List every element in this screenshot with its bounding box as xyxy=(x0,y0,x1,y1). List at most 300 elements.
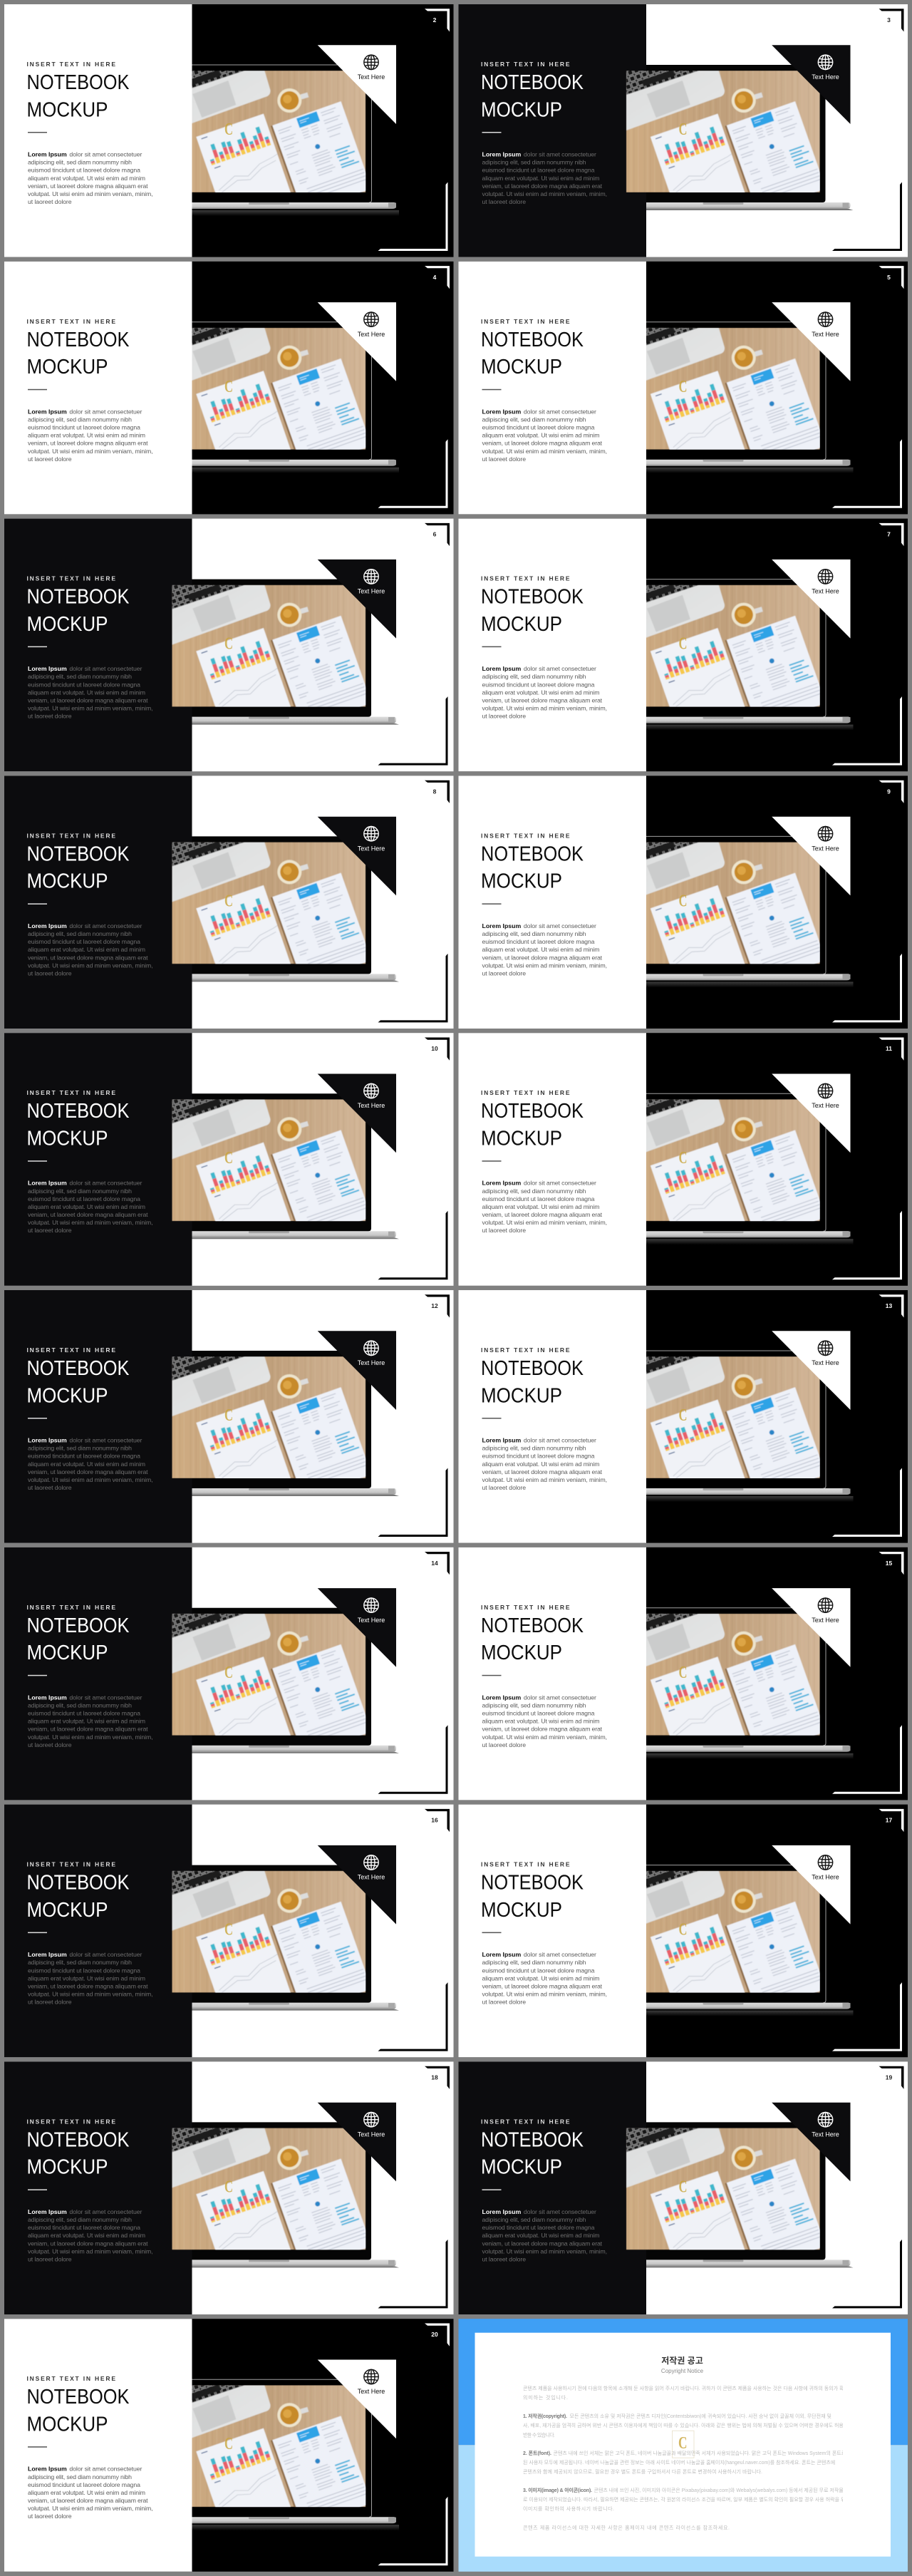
body text: aliquam erat volutpat. Ut wisi enim ad minim xyxy=(28,689,145,696)
watermark: C xyxy=(224,2435,233,2453)
title: NOTEBOOK xyxy=(27,2128,130,2151)
body text: euismod tincidunt ut laoreet dolore magna xyxy=(28,423,140,431)
callout triangle xyxy=(318,1588,396,1667)
body text: veniam, ut laoreet dolore magna aliquam erat xyxy=(28,954,148,961)
body text: aliquam erat volutpat. Ut wisi enim ad minim xyxy=(28,1203,145,1210)
slide 8 xyxy=(4,776,453,1029)
callout triangle: Text Here xyxy=(812,2131,839,2138)
body text: veniam, ut laoreet dolore magna aliquam erat xyxy=(482,1726,603,1733)
body text: adipiscing elit, sed diam nonummy nibh xyxy=(482,1445,586,1452)
page number: 16 xyxy=(431,1817,438,1824)
body text: dolor sit amet consectetuer xyxy=(69,2208,142,2215)
body text: aliquam erat volutpat. Ut wisi enim ad minim xyxy=(28,1718,145,1725)
notice text: 콘텐츠 제품을 사용하시기 전에 다음의 항목에 소개해 둔 사항을 읽어 주시기 바랍니다. 귀하가 이 콘텐츠 제품을 사용하는 것은 다음 사항에 귀하의 동의가 확보되어 있음을 xyxy=(523,2385,874,2391)
body text: volutpat. Ut wisi enim ad minim veniam, minim, xyxy=(28,190,152,197)
callout triangle: Text Here xyxy=(812,588,839,595)
watermark: C xyxy=(678,635,687,654)
laptop screen photo xyxy=(626,1099,826,1253)
title xyxy=(481,843,584,893)
laptop xyxy=(172,579,399,725)
notice text: 로 이용되어 제작되었습니다. 따라서, 필요하면 제공되는 콘텐츠는, 각 원본의 라이선스 조건을 따르며, 일부 제품은 별도의 확인이 필요할 경우 사용 허락을 위하여 사전 xyxy=(523,2496,865,2503)
body text: dolor sit amet consectetuer xyxy=(69,665,142,672)
notice text: 모든 콘텐츠의 소유 및 저작권은 콘텐츠 디자인(Contentsbiwon)에 귀속되어 있습니다. 사전 승낙 없이 글꼴체 이외, 무단전재 및 xyxy=(570,2413,831,2419)
eyebrow: INSERT TEXT IN HERE xyxy=(481,1861,570,1868)
callout triangle xyxy=(318,560,396,639)
body text: adipiscing elit, sed diam nonummy nibh xyxy=(482,2216,586,2223)
dark panel xyxy=(4,1805,192,2057)
laptop xyxy=(172,2122,399,2267)
laptop xyxy=(172,1865,399,2011)
body text: ut laoreet dolore xyxy=(482,969,526,977)
title: NOTEBOOK xyxy=(27,2386,130,2408)
callout triangle xyxy=(772,817,851,895)
watermark: C xyxy=(224,1406,233,1425)
body text: Lorem Ipsum xyxy=(482,1951,521,1958)
body text: adipiscing elit, sed diam nonummy nibh xyxy=(28,1701,132,1709)
title xyxy=(481,1357,584,1407)
watermark: C xyxy=(678,1921,687,1939)
body text: Lorem Ipsum xyxy=(28,151,67,158)
laptop screen photo xyxy=(626,2128,826,2282)
corner brackets xyxy=(832,266,903,508)
page number: 15 xyxy=(886,1560,892,1567)
background xyxy=(4,519,453,771)
body text xyxy=(482,151,607,205)
laptop screen photo xyxy=(626,842,826,996)
body text: ut laoreet dolore xyxy=(28,1227,72,1234)
body text: aliquam erat volutpat. Ut wisi enim ad minim xyxy=(28,2232,145,2239)
callout triangle: Text Here xyxy=(358,1102,385,1109)
body text: euismod tincidunt ut laoreet dolore magna xyxy=(28,1195,140,1202)
title: MOCKUP xyxy=(27,1642,108,1664)
slide 12 xyxy=(4,1290,453,1543)
page number: 5 xyxy=(887,274,891,281)
body text xyxy=(482,665,607,720)
title xyxy=(27,329,130,378)
corner brackets xyxy=(378,1038,450,1279)
copyright title: 저작권 공고 xyxy=(661,2355,703,2366)
laptop screen photo xyxy=(172,1099,372,1253)
page number: 2 xyxy=(433,16,437,24)
title: MOCKUP xyxy=(481,356,562,378)
title: NOTEBOOK xyxy=(27,1100,130,1123)
body text: aliquam erat volutpat. Ut wisi enim ad minim xyxy=(28,175,145,182)
laptop xyxy=(646,1093,854,1245)
body text xyxy=(28,1437,152,1491)
title: NOTEBOOK xyxy=(481,1100,584,1123)
title: MOCKUP xyxy=(27,2413,108,2436)
eyebrow: INSERT TEXT IN HERE xyxy=(481,61,570,68)
slide 7 xyxy=(459,519,908,771)
watermark: C xyxy=(678,1406,687,1425)
body text: aliquam erat volutpat. Ut wisi enim ad minim xyxy=(28,432,145,439)
callout triangle xyxy=(772,560,851,639)
title xyxy=(481,1614,584,1664)
laptop screen photo xyxy=(172,1871,372,2025)
corner brackets xyxy=(832,1552,903,1794)
body text: euismod tincidunt ut laoreet dolore magna xyxy=(482,1195,595,1202)
laptop xyxy=(192,322,399,473)
background xyxy=(4,1805,453,2057)
dark panel xyxy=(4,2061,192,2314)
white panel xyxy=(459,1290,646,1543)
body text: volutpat. Ut wisi enim ad minim veniam, minim, xyxy=(28,1733,152,1741)
callout triangle: Text Here xyxy=(812,1874,839,1881)
title xyxy=(27,2128,130,2179)
callout triangle xyxy=(772,2103,851,2181)
eyebrow: INSERT TEXT IN HERE xyxy=(27,61,115,68)
watermark: C xyxy=(678,2178,687,2196)
body text: Lorem Ipsum xyxy=(482,1437,521,1444)
eyebrow: INSERT TEXT IN HERE xyxy=(481,1089,570,1096)
laptop xyxy=(626,65,854,210)
laptop xyxy=(172,1093,399,1239)
eyebrow: INSERT TEXT IN HERE xyxy=(27,318,115,325)
body text: veniam, ut laoreet dolore magna aliquam erat xyxy=(28,440,148,447)
body text: dolor sit amet consectetuer xyxy=(524,2208,596,2215)
body text: volutpat. Ut wisi enim ad minim veniam, minim, xyxy=(482,705,607,712)
white panel xyxy=(4,262,192,514)
body text: volutpat. Ut wisi enim ad minim veniam, minim, xyxy=(28,448,152,455)
divider xyxy=(482,389,502,390)
body text xyxy=(28,2466,152,2520)
page number: 3 xyxy=(887,16,891,24)
corner brackets xyxy=(378,780,450,1022)
body text: ut laoreet dolore xyxy=(28,1741,72,1748)
body text: ut laoreet dolore xyxy=(28,1484,72,1491)
body text: adipiscing elit, sed diam nonummy nibh xyxy=(482,1187,586,1195)
body text: volutpat. Ut wisi enim ad minim veniam, minim, xyxy=(28,1476,152,1483)
body text: veniam, ut laoreet dolore magna aliquam erat xyxy=(482,182,603,190)
watermark: C xyxy=(224,1921,233,1939)
title: NOTEBOOK xyxy=(481,1357,584,1380)
body text: ut laoreet dolore xyxy=(482,455,526,463)
body text: adipiscing elit, sed diam nonummy nibh xyxy=(482,416,586,423)
page number: 20 xyxy=(431,2331,438,2338)
body text: ut laoreet dolore xyxy=(28,455,72,463)
body text xyxy=(28,2208,152,2262)
body text: ut laoreet dolore xyxy=(482,1227,526,1234)
divider xyxy=(28,389,47,390)
title: MOCKUP xyxy=(27,870,108,893)
laptop xyxy=(172,836,399,982)
body text: Lorem Ipsum xyxy=(28,408,67,415)
page number: 13 xyxy=(886,1302,892,1309)
body text: volutpat. Ut wisi enim ad minim veniam, minim, xyxy=(482,2247,607,2255)
watermark: C xyxy=(678,120,687,139)
light blue lower background xyxy=(459,2445,908,2572)
watermark: C xyxy=(224,1664,233,1682)
body text: volutpat. Ut wisi enim ad minim veniam, minim, xyxy=(28,962,152,969)
page number: 10 xyxy=(431,1045,438,1052)
title: MOCKUP xyxy=(27,1127,108,1150)
body text: volutpat. Ut wisi enim ad minim veniam, minim, xyxy=(482,962,607,969)
body text: aliquam erat volutpat. Ut wisi enim ad minim xyxy=(482,175,600,182)
callout triangle: Text Here xyxy=(358,1617,385,1624)
divider xyxy=(482,1675,502,1676)
callout triangle: Text Here xyxy=(358,2131,385,2138)
slide 17 xyxy=(459,1805,908,2057)
page number: 12 xyxy=(431,1302,438,1309)
body text: dolor sit amet consectetuer xyxy=(524,1437,596,1444)
laptop screen photo xyxy=(172,2128,372,2282)
body text: veniam, ut laoreet dolore magna aliquam erat xyxy=(482,1211,603,1218)
body text: adipiscing elit, sed diam nonummy nibh xyxy=(28,2216,132,2223)
watermark: C xyxy=(678,378,687,396)
title xyxy=(481,71,584,121)
title xyxy=(27,71,130,121)
dark panel xyxy=(4,519,192,771)
body text: adipiscing elit, sed diam nonummy nibh xyxy=(482,1959,586,1966)
body text: aliquam erat volutpat. Ut wisi enim ad minim xyxy=(482,1460,600,1468)
callout triangle: Text Here xyxy=(358,1874,385,1881)
title: NOTEBOOK xyxy=(481,586,584,609)
laptop screen photo xyxy=(626,1871,826,2025)
laptop xyxy=(646,836,854,987)
eyebrow: INSERT TEXT IN HERE xyxy=(27,2375,115,2382)
laptop xyxy=(192,2379,399,2530)
divider xyxy=(28,1160,47,1162)
white panel xyxy=(459,1033,646,1286)
background xyxy=(4,4,453,257)
background xyxy=(459,1547,908,1800)
notice text xyxy=(523,2385,874,2530)
title: MOCKUP xyxy=(481,1384,562,1407)
background xyxy=(459,4,908,257)
body text: Lorem Ipsum xyxy=(28,922,67,929)
body text: Lorem Ipsum xyxy=(28,1694,67,1701)
watermark: C xyxy=(678,2434,687,2453)
laptop screen photo xyxy=(626,71,826,225)
laptop screen photo xyxy=(626,585,826,739)
white panel xyxy=(459,519,646,771)
eyebrow: INSERT TEXT IN HERE xyxy=(481,1346,570,1354)
callout triangle xyxy=(772,45,851,124)
body text xyxy=(28,1694,152,1748)
page number: 17 xyxy=(886,1817,892,1824)
callout triangle xyxy=(772,1073,851,1153)
corner brackets xyxy=(378,1809,450,2051)
eyebrow: INSERT TEXT IN HERE xyxy=(27,832,115,839)
body text: ut laoreet dolore xyxy=(28,198,72,205)
dark panel xyxy=(4,776,192,1029)
notice text: 된 사용자 모두에 제공됩니다. 네이버 나눔글꼴 관련 정보는 아래 사이트 네이버 나눔글꼴 홈페이지(hangeul.naver.com)를 참조하세요. 폰트는 콘텐츠에 xyxy=(523,2459,835,2466)
panel: copyright notice slide xyxy=(459,2319,908,2572)
body text: volutpat. Ut wisi enim ad minim veniam, minim, xyxy=(482,1733,607,1741)
slide 13 xyxy=(459,1290,908,1543)
body text: euismod tincidunt ut laoreet dolore magna xyxy=(482,1453,595,1460)
body text: aliquam erat volutpat. Ut wisi enim ad minim xyxy=(482,946,600,953)
body text xyxy=(28,151,152,205)
body text: euismod tincidunt ut laoreet dolore magna xyxy=(482,2224,595,2231)
body text: veniam, ut laoreet dolore magna aliquam erat xyxy=(482,696,603,704)
eyebrow: INSERT TEXT IN HERE xyxy=(481,318,570,325)
background xyxy=(4,1033,453,1286)
divider xyxy=(482,1160,502,1162)
page number: 7 xyxy=(887,531,891,538)
body text: aliquam erat volutpat. Ut wisi enim ad minim xyxy=(482,432,600,439)
page number: 19 xyxy=(886,2073,892,2081)
body text: dolor sit amet consectetuer xyxy=(69,1180,142,1187)
body text: dolor sit amet consectetuer xyxy=(69,2466,142,2473)
eyebrow: INSERT TEXT IN HERE xyxy=(27,2118,115,2125)
body text xyxy=(28,1951,152,2006)
corner brackets xyxy=(378,2066,450,2308)
page number: 4 xyxy=(433,274,437,281)
title: MOCKUP xyxy=(27,613,108,636)
title: MOCKUP xyxy=(481,98,562,121)
body text: dolor sit amet consectetuer xyxy=(524,1951,596,1958)
corner brackets xyxy=(378,1294,450,1537)
body text xyxy=(482,922,607,977)
page number: 14 xyxy=(431,1560,438,1567)
body text: volutpat. Ut wisi enim ad minim veniam, minim, xyxy=(28,2247,152,2255)
watermark: C xyxy=(224,120,233,139)
body text: aliquam erat volutpat. Ut wisi enim ad minim xyxy=(28,946,145,953)
body text: aliquam erat volutpat. Ut wisi enim ad minim xyxy=(482,689,600,696)
white panel xyxy=(459,776,646,1029)
body text: adipiscing elit, sed diam nonummy nibh xyxy=(28,416,132,423)
title: MOCKUP xyxy=(27,2156,108,2179)
body text: aliquam erat volutpat. Ut wisi enim ad minim xyxy=(28,1460,145,1468)
body text: veniam, ut laoreet dolore magna aliquam erat xyxy=(28,182,148,190)
body text: veniam, ut laoreet dolore magna aliquam erat xyxy=(482,1983,603,1990)
body text: Lorem Ipsum xyxy=(482,665,521,672)
callout triangle xyxy=(318,2103,396,2181)
body text: Lorem Ipsum xyxy=(28,1951,67,1958)
body text: veniam, ut laoreet dolore magna aliquam erat xyxy=(28,2497,148,2504)
slide 18 xyxy=(4,2061,453,2314)
title: NOTEBOOK xyxy=(481,1872,584,1895)
divider xyxy=(482,903,502,905)
background xyxy=(459,519,908,771)
body text: ut laoreet dolore xyxy=(28,1999,72,2006)
body text: veniam, ut laoreet dolore magna aliquam erat xyxy=(482,1468,603,1475)
title: NOTEBOOK xyxy=(27,71,130,94)
body text: ut laoreet dolore xyxy=(482,713,526,720)
laptop xyxy=(192,65,399,216)
eyebrow: INSERT TEXT IN HERE xyxy=(27,575,115,582)
eyebrow: INSERT TEXT IN HERE xyxy=(27,1861,115,1868)
divider xyxy=(482,132,502,133)
callout triangle xyxy=(772,1331,851,1410)
body text xyxy=(28,1180,152,1234)
page number: 11 xyxy=(886,1045,892,1052)
background xyxy=(4,1290,453,1543)
slide 3 xyxy=(459,4,908,257)
slide 5 xyxy=(459,262,908,514)
callout triangle: Text Here xyxy=(358,73,385,81)
corner brackets xyxy=(832,1809,903,2051)
watermark: C xyxy=(678,892,687,910)
corner brackets xyxy=(378,523,450,766)
callout triangle: Text Here xyxy=(812,73,839,81)
body text: ut laoreet dolore xyxy=(28,2255,72,2262)
eyebrow: INSERT TEXT IN HERE xyxy=(481,1604,570,1611)
dark panel xyxy=(4,1290,192,1543)
body text xyxy=(482,2208,607,2262)
background xyxy=(459,1290,908,1543)
divider xyxy=(28,2446,47,2448)
title: NOTEBOOK xyxy=(481,1614,584,1637)
dark panel xyxy=(459,2061,646,2314)
body text xyxy=(482,1694,607,1748)
callout triangle xyxy=(318,2359,396,2438)
body text: euismod tincidunt ut laoreet dolore magna xyxy=(482,167,595,174)
title xyxy=(27,586,130,636)
body text: dolor sit amet consectetuer xyxy=(69,408,142,415)
callout triangle: Text Here xyxy=(358,588,385,595)
watermark: C xyxy=(678,1664,687,1682)
body text: euismod tincidunt ut laoreet dolore magna xyxy=(28,2481,140,2488)
body text: Lorem Ipsum xyxy=(28,2208,67,2215)
laptop screen photo xyxy=(626,1614,826,1768)
body text: ut laoreet dolore xyxy=(28,969,72,977)
body text: dolor sit amet consectetuer xyxy=(69,922,142,929)
body text xyxy=(482,1437,607,1491)
notice text: 콘텐츠 내에 쓰인 서체는 맑은 고딕 폰트, 네이버 나눔글꼴과 배달의민족 서체가 사용되었습니다. 맑은 고딕 폰트는 Windows System의 폰트로 xyxy=(553,2450,846,2456)
body text: euismod tincidunt ut laoreet dolore magna xyxy=(28,938,140,945)
title: MOCKUP xyxy=(27,356,108,378)
watermark: C xyxy=(224,2178,233,2196)
eyebrow: INSERT TEXT IN HERE xyxy=(27,1604,115,1611)
body text: aliquam erat volutpat. Ut wisi enim ad minim xyxy=(28,1974,145,1982)
body text: Lorem Ipsum xyxy=(482,1180,521,1187)
divider xyxy=(28,903,47,905)
slide 14 xyxy=(4,1547,453,1800)
body text: veniam, ut laoreet dolore magna aliquam erat xyxy=(482,954,603,961)
body text: dolor sit amet consectetuer xyxy=(524,1180,596,1187)
title xyxy=(27,1614,130,1664)
body text: adipiscing elit, sed diam nonummy nibh xyxy=(28,1187,132,1195)
body text: adipiscing elit, sed diam nonummy nibh xyxy=(482,159,586,166)
copyright subtitle: Copyright Notice xyxy=(661,2368,704,2374)
callout triangle xyxy=(318,817,396,895)
title: MOCKUP xyxy=(481,1899,562,1922)
watermark: C xyxy=(224,635,233,654)
laptop screen photo xyxy=(172,1356,372,1510)
title: MOCKUP xyxy=(27,1899,108,1922)
title: NOTEBOOK xyxy=(27,1357,130,1380)
notice text: 콘텐츠 제품 라이선스에 대한 자세한 사항은 홈페이지 내에 콘텐츠 라이선스를 참조하세요. xyxy=(523,2524,730,2530)
background xyxy=(459,1033,908,1286)
body text: Lorem Ipsum xyxy=(28,1437,67,1444)
body text: volutpat. Ut wisi enim ad minim veniam, minim, xyxy=(28,1219,152,1226)
laptop screen photo xyxy=(172,71,372,225)
laptop screen photo xyxy=(172,1614,372,1768)
callout triangle xyxy=(772,302,851,381)
body text xyxy=(28,408,152,463)
laptop screen photo xyxy=(172,2385,372,2539)
title: MOCKUP xyxy=(481,613,562,636)
title: NOTEBOOK xyxy=(481,2128,584,2151)
body text: dolor sit amet consectetuer xyxy=(524,1694,596,1701)
callout triangle xyxy=(318,302,396,381)
slide 9 xyxy=(459,776,908,1029)
body text: adipiscing elit, sed diam nonummy nibh xyxy=(28,1445,132,1452)
watermark: C xyxy=(224,1149,233,1168)
callout triangle xyxy=(318,1331,396,1410)
body text: volutpat. Ut wisi enim ad minim veniam, minim, xyxy=(28,1991,152,1998)
eyebrow: INSERT TEXT IN HERE xyxy=(27,1089,115,1096)
body text: dolor sit amet consectetuer xyxy=(524,665,596,672)
body text: euismod tincidunt ut laoreet dolore magna xyxy=(482,423,595,431)
white panel xyxy=(459,1547,646,1800)
divider xyxy=(28,1675,47,1676)
slide 20 xyxy=(4,2319,453,2572)
title xyxy=(481,2128,584,2179)
body text: dolor sit amet consectetuer xyxy=(69,1951,142,1958)
